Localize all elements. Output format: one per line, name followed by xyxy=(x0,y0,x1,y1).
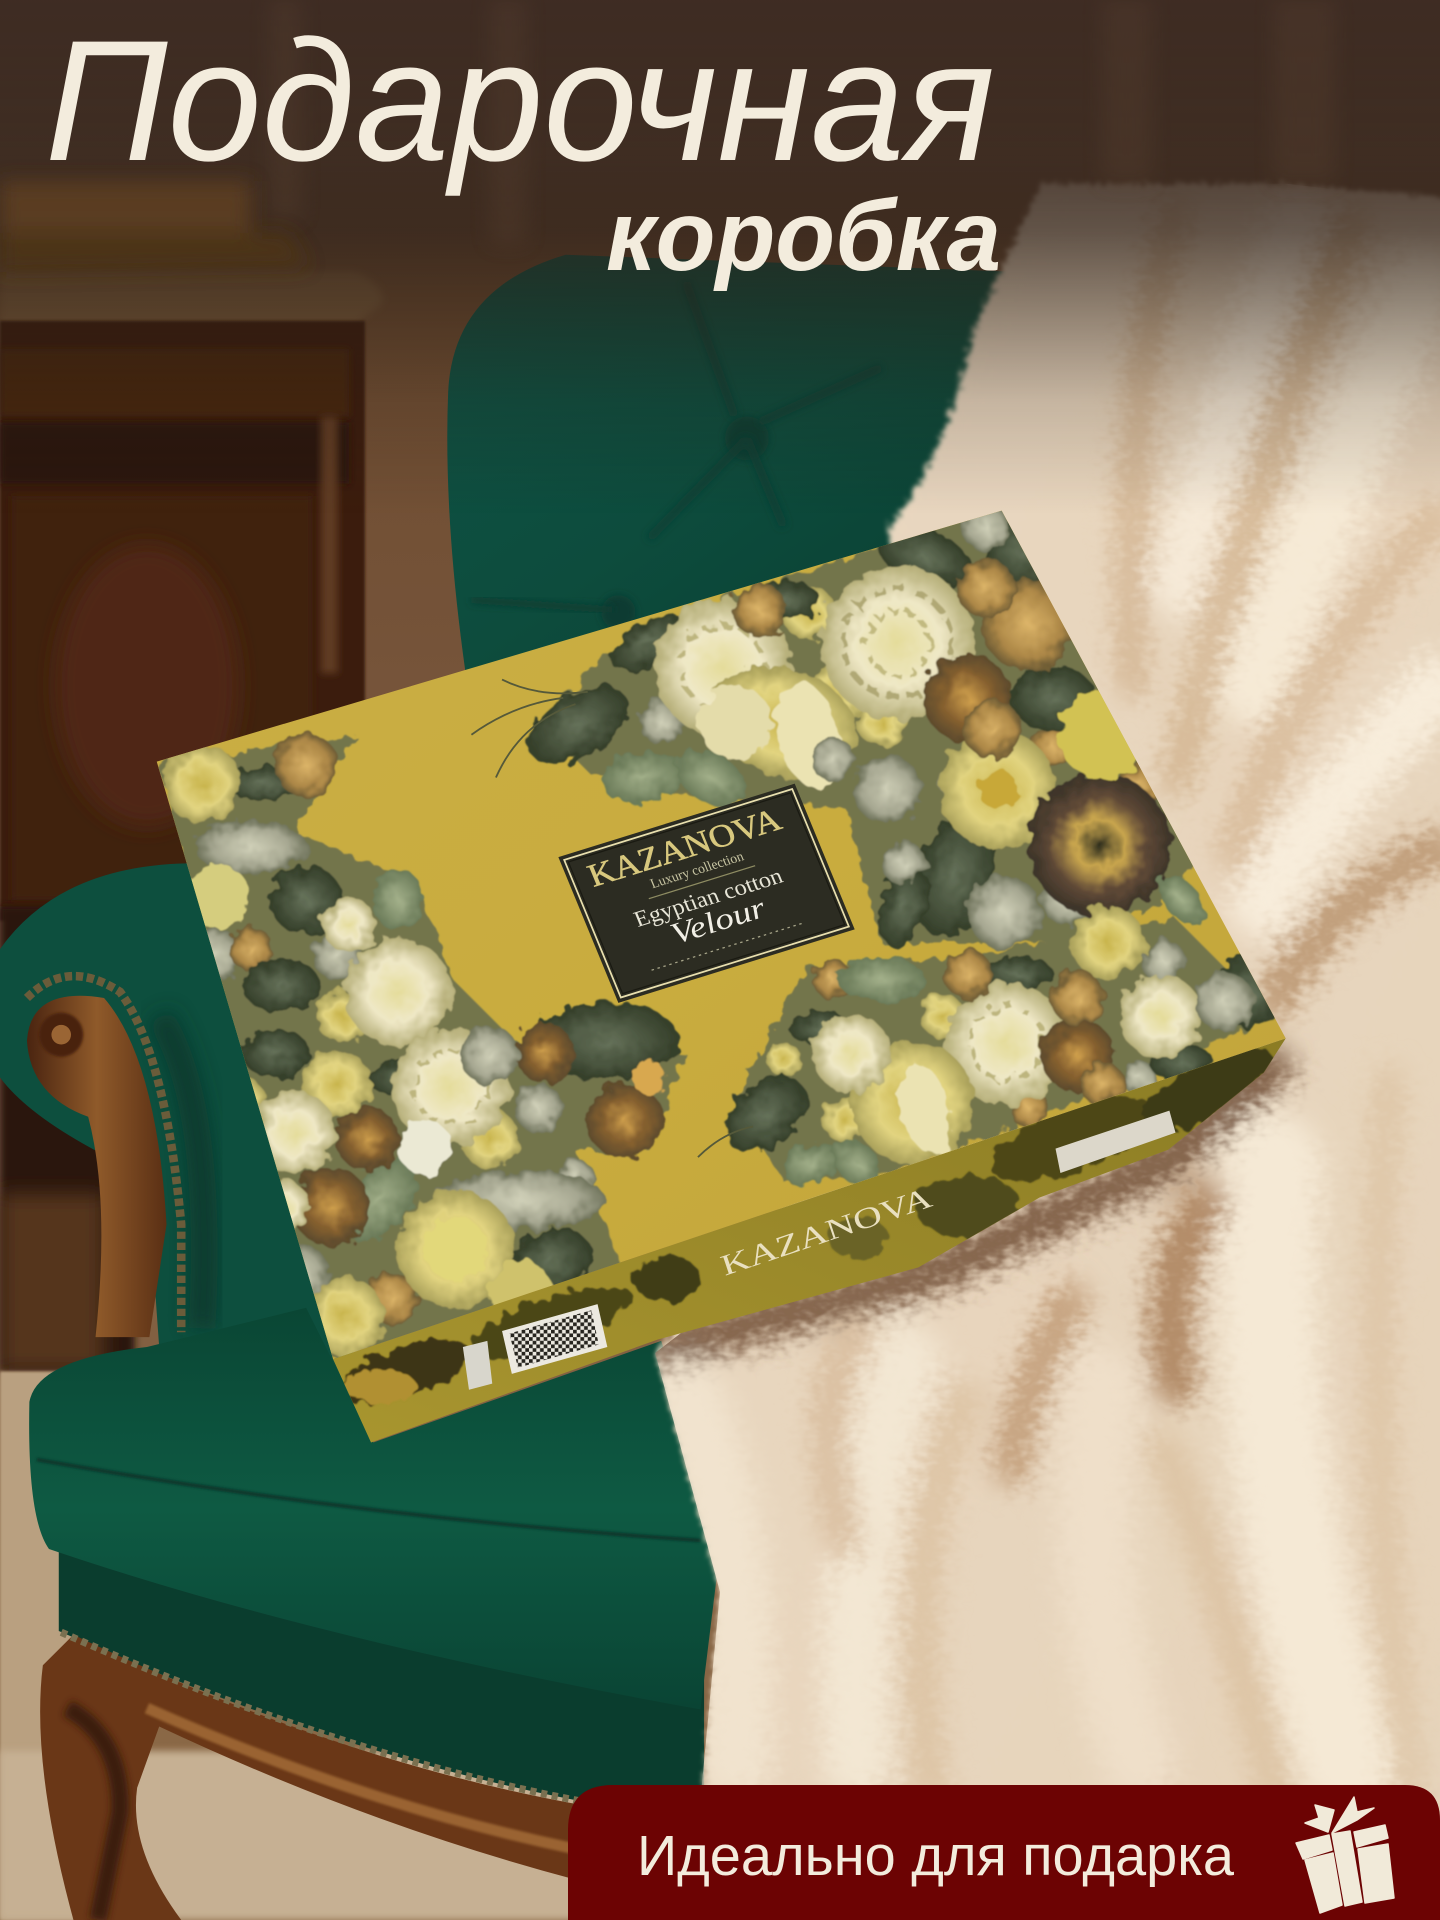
velour script: Velour xyxy=(666,891,771,951)
base tones under bouquets xyxy=(157,511,1273,1359)
QR code xyxy=(502,1304,607,1374)
top dark gradient overlay xyxy=(0,0,1440,514)
side info label xyxy=(1056,1111,1176,1173)
lower right bouquet xyxy=(709,906,1281,1196)
title: Подарочная: Подарочная xyxy=(45,5,995,197)
left bouquet leaves xyxy=(222,767,680,1305)
upper right bouquet leaves xyxy=(514,514,1214,953)
side brand text: KAZANOVA xyxy=(717,1182,936,1283)
barcode label xyxy=(463,1341,492,1390)
callout panel: perfect for a gift xyxy=(568,1785,1440,1920)
material line: Egyptian cotton xyxy=(630,863,786,932)
chair back xyxy=(447,255,1016,671)
fur throw xyxy=(655,184,1440,1837)
icon: gift box xyxy=(1296,1797,1394,1913)
gift box xyxy=(157,502,1286,1442)
brand name: KAZANOVA xyxy=(583,802,787,895)
cabinet xyxy=(0,272,382,1371)
collection line: Luxury collection xyxy=(648,848,746,891)
left bouquet flowers xyxy=(163,733,666,1356)
chair wooden rail and leg xyxy=(40,1632,588,1920)
subtitle: коробка: коробка xyxy=(606,180,1001,292)
chair arm xyxy=(0,863,367,1396)
faint curtain folds xyxy=(269,0,1335,245)
upper right bouquet flowers xyxy=(654,502,1171,949)
cabinet ornament xyxy=(0,181,309,272)
floral print: box lid xyxy=(157,502,1281,1359)
carpet floor xyxy=(0,1371,588,1920)
filler blossoms xyxy=(187,585,1185,1325)
chair seat cushion xyxy=(29,1308,722,1802)
box label: Kazanova xyxy=(558,784,855,1003)
callout text: Идеально для подарка xyxy=(637,1824,1234,1888)
box side face xyxy=(331,1030,1286,1442)
box top face xyxy=(157,511,1286,1359)
thin stems xyxy=(471,680,753,1157)
